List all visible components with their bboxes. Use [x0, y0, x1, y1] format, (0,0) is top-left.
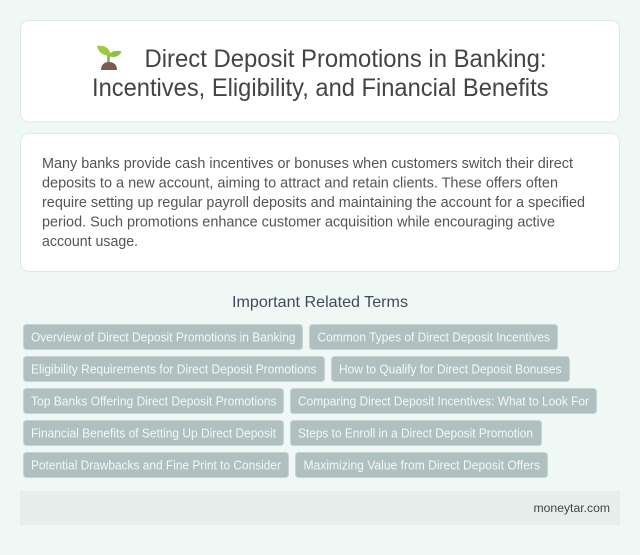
- description text: deposits to a new account, aiming to attract and retain clients. These offers often: [42, 174, 558, 192]
- tag: how to qualify: [332, 356, 570, 382]
- description text: require setting up regular payroll deposits and maintaining the account for a specified: [42, 194, 585, 211]
- description text: period. Such promotions enhance customer acquisition while encouraging active: [42, 214, 555, 230]
- title heading: Direct Deposit Promotions in Banking:: [144, 45, 546, 73]
- tag: steps to enroll: Steps to Enroll in a Direct Deposit Promotion: [298, 426, 533, 440]
- tag: maximizing value: [296, 452, 548, 478]
- tag: eligibility: [24, 356, 324, 382]
- tag: comparing: [290, 388, 596, 414]
- tag: common types: [310, 324, 558, 350]
- tag: how to qualify: How to Qualify for Direct Deposit Bonuses: [339, 362, 562, 376]
- icon: seedling: [97, 46, 122, 70]
- tag: financial benefits: Financial Benefits of Setting Up Direct Deposit: [31, 426, 276, 440]
- title heading: Incentives, Eligibility, and Financial Benefits: [92, 74, 548, 102]
- tag: comparing: Comparing Direct Deposit Incentives: What to Look For: [298, 394, 590, 408]
- tag: eligibility: Eligibility Requirements for Direct Deposit Promotions: [31, 362, 316, 376]
- title heading: [92, 45, 548, 102]
- description text: [42, 155, 585, 250]
- heading: important related terms: Important Related Terms: [232, 294, 408, 311]
- description text: account usage.: [42, 233, 138, 250]
- tag: potential drawbacks: Potential Drawbacks and Fine Print to Consider: [31, 458, 282, 472]
- tag: financial benefits: [24, 420, 284, 446]
- tag: overview: [24, 324, 302, 350]
- tag: common types: Common Types of Direct Deposit Incentives: [318, 330, 550, 344]
- title panel: [20, 20, 620, 122]
- tag: maximizing value: Maximizing Value from Direct Deposit Offers: [304, 458, 540, 472]
- tag: top banks: Top Banks Offering Direct Deposit Promotions: [31, 394, 276, 408]
- description text: Many banks provide cash incentives or bonuses when customers switch their direct: [42, 155, 574, 172]
- tag: steps to enroll: [290, 420, 542, 446]
- related terms tags: [24, 324, 596, 478]
- footer source: moneytar.com: [534, 501, 610, 515]
- panel: description: [20, 134, 620, 272]
- footer: [20, 491, 620, 525]
- tag: top banks: [24, 388, 284, 414]
- tag: overview: Overview of Direct Deposit Promotions in Banking: [31, 330, 296, 344]
- tag: potential drawbacks: [24, 452, 288, 478]
